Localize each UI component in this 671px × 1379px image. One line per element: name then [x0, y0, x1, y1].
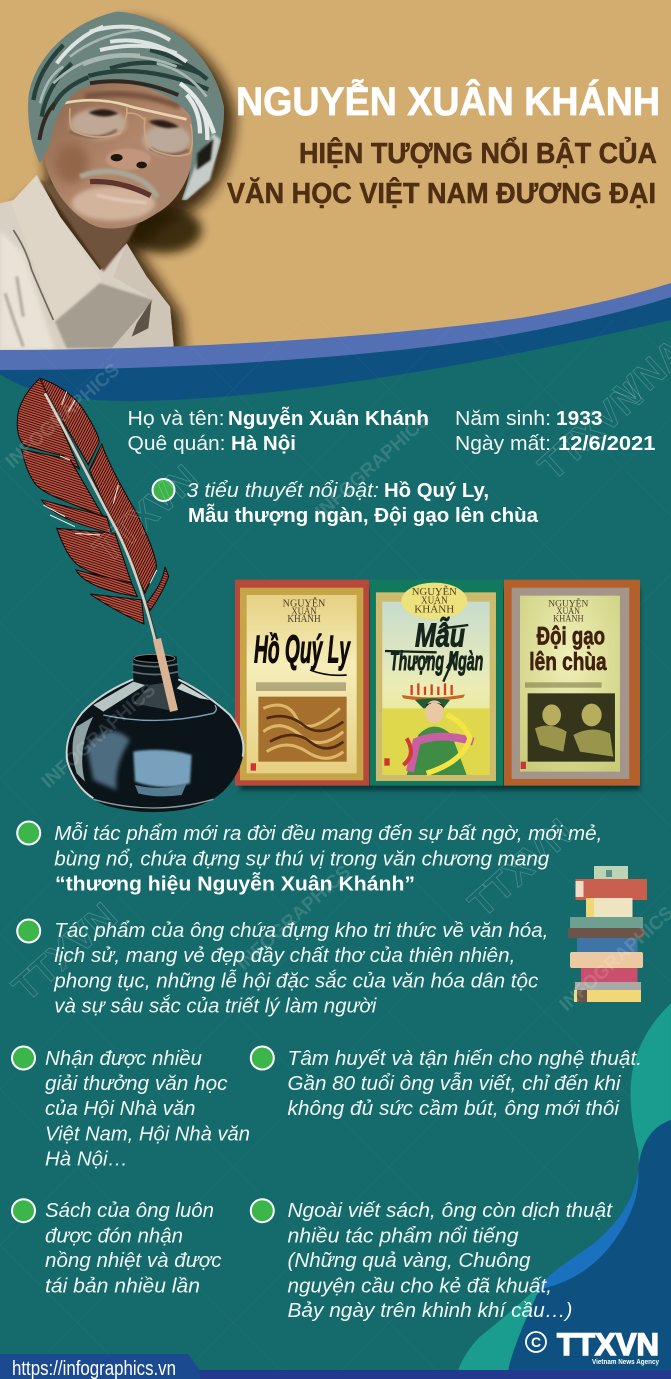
- main title: NGUYỄN XUÂN KHÁNH: [236, 80, 660, 124]
- point: warmly received books: nồng nhiệt và được: [45, 1249, 222, 1272]
- watermarks: TTXVN: [86, 457, 207, 572]
- watermarks: [2, 331, 671, 1016]
- book: Đội gạo lên chùa: NGUYỄN: [548, 596, 589, 609]
- birth year: Năm sinh:: [455, 407, 551, 430]
- point: knowledge in works: và sự sâu sắc của triết lý làm người: [54, 994, 378, 1018]
- subtitle: [227, 137, 657, 210]
- point: literary awards: Việt Nam, Hội Nhà văn: [45, 1122, 250, 1146]
- logo: TTXVN: Vietnam News Agency: [592, 1357, 660, 1366]
- wave: periwinkle band: [0, 283, 671, 420]
- watermarks: INFOGRAPHICS: [2, 360, 124, 473]
- novels note: 3 tiểu thuyết nổi bật:: [186, 479, 379, 502]
- point: knowledge in works: lịch sử, mang vẻ đẹp đầy chất thơ của thiên nhiên,: [54, 944, 515, 967]
- novels note: [152, 479, 539, 527]
- novels note: Mẫu thượng ngàn, Đội gạo lên chùa: [188, 503, 539, 527]
- biography info: [128, 406, 656, 455]
- point: translation work: nhiều tác phẩm nổi tiếng: [288, 1224, 519, 1248]
- book: Hồ Quý Ly: Hồ Quý Ly: [254, 627, 351, 671]
- glasses: [60, 100, 193, 156]
- teal main panel: [0, 320, 671, 1379]
- point: surprise of each work: Mỗi tác phẩm mới ra đời đều mang đến sự bất ngờ, mới mẻ,: [54, 822, 602, 845]
- point: warmly received books: [12, 1199, 222, 1298]
- watermarks: INFOGRAPHICS: [38, 680, 160, 793]
- point: translation work: [251, 1199, 613, 1322]
- watermarks: TTXVN: [531, 374, 652, 489]
- bullet: [12, 1199, 35, 1222]
- corner decorative waves: [458, 1003, 671, 1370]
- quill shaft: [45, 393, 160, 662]
- watermarks: TTXVN: [5, 895, 126, 1010]
- book: Mẫu Thượng Ngàn: Mẫu: [415, 617, 465, 655]
- watermarks: TTXVN: [461, 811, 582, 926]
- book: Đội gạo lên chùa: lên chùa: [529, 648, 607, 676]
- point: translation work: Bảy ngày trên khinh khí cầu…): [288, 1299, 572, 1322]
- point: dedication to art: không đủ sức cầm bút, ông mới thôi: [288, 1097, 620, 1120]
- hair: [28, 12, 224, 200]
- point: translation work: nguyện cầu cho kẻ đã khuất,: [288, 1274, 552, 1298]
- point: knowledge in works: phong tục, những lễ hội đặc sắc của văn hóa dân tộc: [53, 970, 539, 992]
- quill tip in ink: [153, 638, 178, 712]
- bullet: [17, 822, 40, 844]
- point: warmly received books: tái bản nhiều lần: [45, 1274, 200, 1298]
- portrait: Nguyễn Xuân Khánh: [0, 12, 235, 357]
- title: [227, 80, 660, 210]
- book: Đội gạo lên chùa: XUÂN: [557, 605, 580, 617]
- icon: stack of books: [568, 866, 647, 1002]
- icon: feather quill: [17, 378, 169, 662]
- wave: dark blue band: [0, 297, 671, 420]
- icon: inkwell: [66, 654, 243, 812]
- oval author badge: [401, 583, 467, 619]
- point: knowledge in works: [17, 919, 548, 1018]
- book: Mẫu Thượng Ngàn: Thượng Ngàn: [390, 646, 483, 676]
- biography info: Nguyễn Xuân Khánh: [228, 406, 429, 430]
- book: Hồ Quý Ly: NGUYỄN: [283, 597, 325, 610]
- book: Đội gạo lên chùa: Đội gạo: [537, 623, 605, 650]
- name: Họ và tên:: [128, 407, 224, 430]
- neck: [40, 180, 143, 272]
- point: warmly received books: Sách của ông luôn: [45, 1199, 214, 1222]
- book: Mẫu Thượng Ngàn: [370, 580, 503, 786]
- biography info: 12/6/2021: [558, 432, 656, 455]
- logo: TTXVN: C: [531, 1334, 541, 1350]
- point: literary awards: Nhận được nhiều: [45, 1047, 202, 1070]
- point: translation work: Ngoài viết sách, ông còn dịch thuật: [288, 1199, 613, 1222]
- novels note: Hồ Quý Ly,: [384, 479, 489, 502]
- bottom bar: [0, 1370, 671, 1379]
- bullet: [251, 1199, 274, 1222]
- book: Mẫu Thượng Ngàn: KHÁNH: [414, 604, 455, 616]
- point: surprise of each work: [17, 822, 602, 896]
- face: [42, 78, 195, 229]
- biography info: Hà Nội: [231, 432, 296, 455]
- death date: Ngày mất:: [455, 432, 551, 455]
- white nicks: [43, 392, 157, 583]
- watermarks: INFOGRAPHICS: [312, 410, 434, 523]
- point: dedication to art: Gần 80 tuổi ông vẫn viết, chỉ đến khi: [288, 1072, 622, 1095]
- point: surprise of each work: bùng nổ, chứa đựng sự thú vị trong văn chương mang: [54, 848, 550, 870]
- hometown: Quê quán:: [128, 432, 226, 455]
- logo: TTXVN: TTXVN: [557, 1326, 659, 1362]
- point: literary awards: [12, 1046, 250, 1170]
- point: translation work: (Những quả vàng, Chuông: [288, 1249, 531, 1272]
- bullet: [17, 920, 40, 942]
- point: knowledge in works: Tác phẩm của ông chứa đựng kho tri thức về văn hóa,: [54, 919, 548, 942]
- book: Hồ Quý Ly: XUÂN: [291, 605, 317, 617]
- logo: TTXVN: [526, 1326, 660, 1366]
- subtitle: VĂN HỌC VIỆT NAM ĐƯƠNG ĐẠI: [227, 178, 656, 210]
- point: literary awards: Hà Nội…: [45, 1148, 128, 1170]
- ribbons: [410, 737, 473, 772]
- bullet: [251, 1046, 274, 1070]
- biography info: 1933: [556, 407, 602, 430]
- point: literary awards: giải thưởng văn học: [45, 1072, 228, 1095]
- subtitle: HIỆN TƯỢNG NỔI BẬT CỦA: [299, 137, 657, 170]
- book: Đội gạo lên chùa: [504, 580, 640, 786]
- headdress: [402, 694, 465, 701]
- feather vanes: [17, 378, 169, 624]
- point: dedication to art: Tâm huyết và tận hiến cho nghệ thuật.: [288, 1047, 642, 1070]
- point: literary awards: của Hội Nhà văn: [45, 1097, 196, 1120]
- bullet: [12, 1046, 35, 1070]
- header background: [0, 0, 671, 400]
- point: surprise of each work: “thương hiệu Nguyễn Xuân Khánh”: [55, 872, 415, 896]
- book: Hồ Quý Ly: KHÁNH: [287, 613, 321, 625]
- watermarks: INFOGRAPHICS: [233, 862, 355, 975]
- book: Mẫu Thượng Ngàn: XUÂN: [421, 594, 448, 606]
- book covers: [235, 580, 640, 790]
- bullet: [152, 479, 174, 501]
- book: Đội gạo lên chùa: KHÁNH: [553, 613, 584, 625]
- point: dedication to art: [251, 1046, 642, 1120]
- shirt: [0, 175, 174, 350]
- point: warmly received books: được đón nhận: [45, 1224, 183, 1248]
- book: Hồ Quý Ly: [235, 580, 369, 786]
- book: Mẫu Thượng Ngàn: NGUYỄN: [412, 585, 457, 598]
